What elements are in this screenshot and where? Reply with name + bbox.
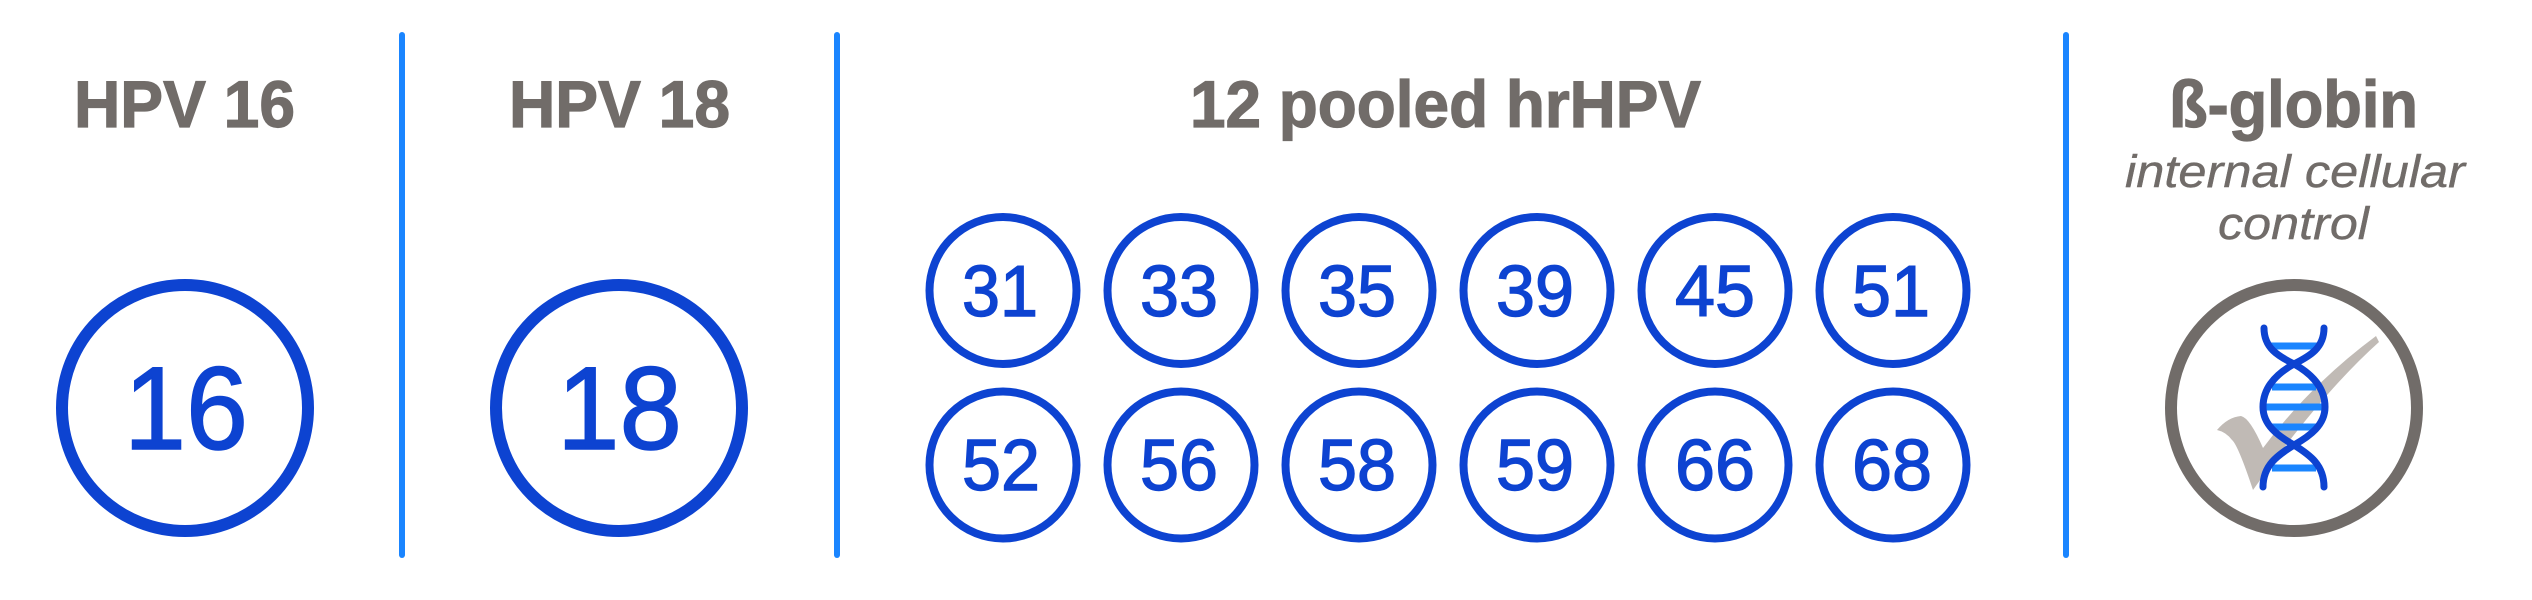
- badge: 39: [1464, 217, 1610, 364]
- panel: HPV 18: [496, 67, 742, 531]
- badge: 56: 56: [1140, 426, 1218, 506]
- badge: 31: [930, 217, 1076, 364]
- badge: 35: 35: [1318, 252, 1396, 332]
- badge: 33: [1108, 217, 1254, 364]
- badge: 39: 39: [1496, 252, 1574, 332]
- badge: 35: [1286, 217, 1432, 364]
- divider: [399, 32, 405, 558]
- panel: beta-globin: [2125, 67, 2467, 531]
- badge: 18: [496, 285, 742, 531]
- badge: 31: 31: [962, 252, 1038, 332]
- badge: 18: 18: [557, 343, 682, 475]
- badge: 33: 33: [1140, 252, 1218, 332]
- panel: 12 pooled hrHPV: [930, 67, 1966, 538]
- badge: 58: 58: [1318, 426, 1396, 506]
- heading: ß-globin: ß-globin: [2169, 67, 2418, 141]
- badge: 51: [1820, 217, 1966, 364]
- badge: 66: [1642, 392, 1788, 538]
- badge: 66: 66: [1675, 426, 1755, 506]
- badge: 58: [1286, 392, 1432, 538]
- badge: 59: [1464, 392, 1610, 538]
- divider: [2063, 32, 2069, 558]
- heading: HPV 18: HPV 18: [509, 67, 730, 141]
- heading: 12 pooled hrHPV: 12 pooled hrHPV: [1190, 67, 1701, 141]
- badge: 51: 51: [1852, 252, 1930, 332]
- badge: 45: 45: [1675, 252, 1755, 332]
- badge: 16: [62, 285, 308, 531]
- badge: 16: 16: [124, 343, 248, 475]
- badge: 59: 59: [1496, 426, 1574, 506]
- badge: 68: 68: [1852, 426, 1932, 506]
- badge: 52: [930, 392, 1076, 538]
- divider: [834, 32, 840, 558]
- icon: check mark: [2217, 336, 2379, 490]
- subtitle: internal cellular control: [2125, 146, 2467, 249]
- badge: 56: [1108, 392, 1254, 538]
- heading: HPV 16: HPV 16: [74, 67, 295, 141]
- icon: DNA rungs: [2266, 346, 2322, 468]
- icon: DNA strands: [2263, 328, 2325, 487]
- panel: HPV 16: [62, 67, 308, 531]
- badge: 45: [1642, 217, 1788, 364]
- icon: DNA with check mark in circle: [2171, 285, 2417, 531]
- badge: 68: [1820, 392, 1966, 538]
- subtitle: internal cellular control: control: [2218, 198, 2371, 249]
- subtitle: internal cellular control: internal cellular: [2125, 146, 2467, 197]
- badge: 52: 52: [962, 426, 1040, 506]
